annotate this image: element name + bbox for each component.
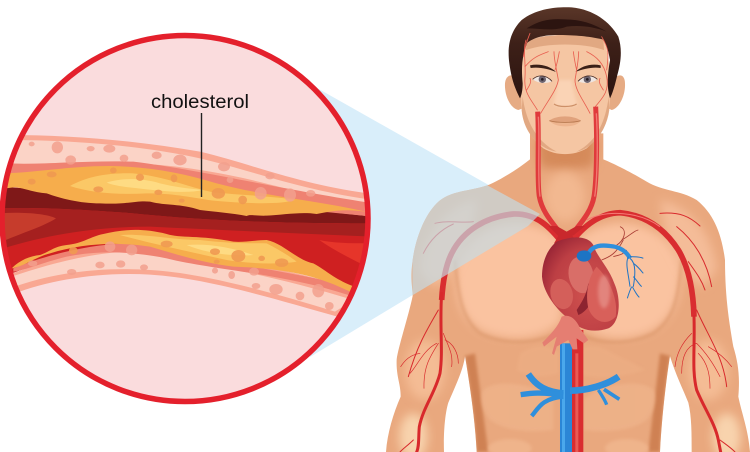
- nose: [553, 80, 577, 107]
- lumen dark upper layer: [0, 187, 373, 223]
- lower artery wall: [13, 252, 348, 316]
- blocked artery: [0, 135, 373, 317]
- hair: [509, 7, 621, 98]
- translucent shoulder overlay: [412, 185, 540, 295]
- aortic arch right: [569, 213, 694, 317]
- upper plaque yellow: [70, 173, 295, 203]
- face shading: [522, 35, 609, 152]
- left ear: [505, 75, 523, 110]
- left arm artery: [400, 222, 473, 452]
- pink vessel stub under heart: [542, 316, 588, 355]
- aortic arch left: [442, 214, 564, 300]
- branching veins: [521, 374, 619, 416]
- lower plaque yellow: [120, 235, 297, 263]
- right eyebrow: [575, 65, 601, 72]
- label leader line: [200, 113, 202, 197]
- blue pulmonary vein: [577, 246, 643, 298]
- vena cava: [521, 343, 619, 452]
- face: [521, 35, 610, 154]
- upper wall red layer: [0, 161, 373, 217]
- heart: [542, 226, 619, 355]
- left carotid artery: [538, 112, 558, 231]
- heart highlight: [598, 275, 610, 308]
- right carotid artery: [575, 107, 597, 231]
- nose underside: [554, 104, 577, 106]
- heart lobe right: [587, 267, 616, 322]
- lumen: [5, 188, 366, 286]
- coronary red branches: [602, 227, 638, 260]
- left eyebrow: [530, 65, 556, 72]
- left eye: [533, 76, 552, 83]
- plaque spots: [28, 167, 288, 267]
- aorta: [571, 330, 583, 452]
- upper wall light layer: [14, 140, 364, 202]
- lower wall light layer: [7, 252, 353, 312]
- head arteries: [523, 33, 608, 113]
- upper plaque: [0, 166, 373, 216]
- right highlight: [320, 240, 364, 263]
- torso and arms: [386, 133, 750, 452]
- label: cholesterol: cholesterol: [151, 91, 249, 113]
- heart lobe middle: [566, 255, 596, 295]
- human body figure: [386, 7, 750, 452]
- lower wall red layer: [13, 243, 353, 295]
- hair highlight band: [527, 19, 607, 32]
- lower plaque: [12, 230, 353, 292]
- lower plaque pale yellow: [187, 245, 253, 255]
- vena cava highlight: [562, 343, 565, 452]
- right ear: [608, 75, 625, 110]
- right arm artery: [660, 213, 735, 452]
- carotid highlights: [538, 113, 597, 197]
- aorta highlight: [575, 353, 578, 452]
- upper artery outer wall: [0, 135, 373, 217]
- right eye: [578, 76, 597, 83]
- left highlight: [4, 212, 56, 240]
- heart crease: [577, 283, 593, 315]
- wall cell spots: [28, 141, 334, 310]
- heart muscle: [542, 237, 619, 331]
- red circle border: [2, 36, 368, 402]
- artery highlight: [587, 213, 660, 227]
- magnifier wedge: [310, 88, 540, 357]
- circle fill: [2, 36, 368, 402]
- great vessels at top of heart: [548, 226, 585, 243]
- heart lobe left: [547, 276, 576, 312]
- zoom circle: artery cross-section: [0, 36, 373, 402]
- upper plaque pale yellow: [107, 179, 203, 192]
- mouth: [549, 116, 581, 126]
- lumen middle layer: [0, 208, 373, 250]
